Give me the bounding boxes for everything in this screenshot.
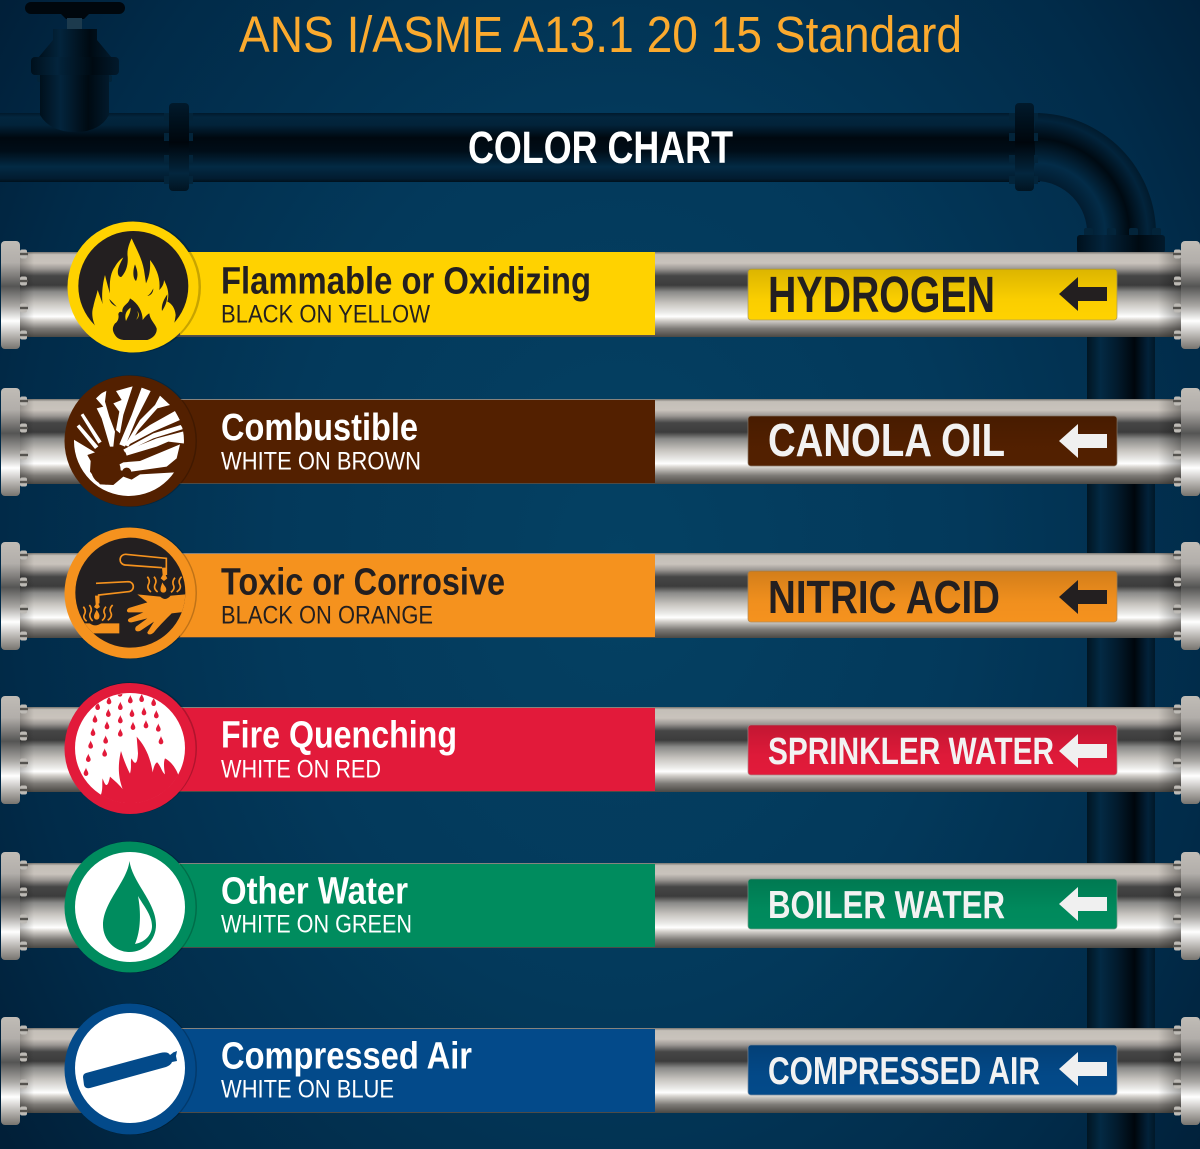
heading: Flammable or Oxidizing (221, 260, 591, 302)
icon: explosion (64, 375, 197, 507)
icon: water on fire (64, 682, 197, 814)
caption: BLACK ON ORANGE (221, 602, 433, 630)
row: other water (1, 841, 1200, 973)
pipe marker: NITRIC ACID (768, 571, 1000, 623)
caption: WHITE ON RED (221, 756, 381, 784)
valve (25, 2, 125, 132)
elbow flange (1077, 228, 1165, 253)
horizontal dark pipe (0, 113, 1040, 182)
banner (180, 400, 655, 483)
heading: Other Water (221, 870, 408, 912)
pipe marker: COMPRESSED AIR (768, 1050, 1040, 1093)
banner (180, 1029, 655, 1112)
icon: water drop (64, 841, 197, 973)
row: flammable or oxidizing (1, 221, 1200, 353)
pipe marker: CANOLA OIL (768, 414, 1005, 466)
banner (180, 252, 655, 335)
vertical dark pipe (1087, 240, 1155, 1149)
pipe marker: BOILER WATER (768, 884, 1005, 927)
row: toxic or corrosive (1, 527, 1200, 659)
silver pipe (1, 1017, 1200, 1125)
caption: WHITE ON BROWN (221, 448, 421, 476)
banner (180, 864, 655, 947)
heading: Compressed Air (221, 1036, 472, 1078)
banner (180, 554, 655, 637)
icon: corrosive (64, 527, 197, 659)
pipe marker (748, 879, 1117, 929)
right pipe flange (1009, 103, 1038, 191)
subtitle: color chart: COLOR CHART (468, 122, 733, 173)
silver pipe (1, 696, 1200, 804)
silver pipe (1, 852, 1200, 960)
heading: Toxic or Corrosive (221, 562, 505, 604)
pipe marker: SPRINKLER WATER (768, 731, 1054, 773)
caption: WHITE ON BLUE (221, 1076, 394, 1104)
icon: flame (68, 221, 201, 353)
row: fire quenching (1, 682, 1200, 814)
pipe elbow (1035, 113, 1156, 236)
row: compressed air (1, 1003, 1200, 1135)
silver pipe (1, 241, 1200, 349)
banner (180, 708, 655, 791)
silver pipe (1, 388, 1200, 496)
left pipe flange (164, 103, 193, 191)
caption: WHITE ON GREEN (221, 910, 412, 938)
title: ANS I/ASME A13.1 20 15 Standard (239, 6, 962, 63)
heading: Fire Quenching (221, 714, 457, 756)
silver pipe (1, 542, 1200, 650)
pipe marker: HYDROGEN (768, 266, 995, 323)
heading: Combustible (221, 407, 418, 449)
icon: gas cylinder (64, 1003, 197, 1135)
row: combustible (1, 375, 1200, 507)
caption: BLACK ON YELLOW (221, 300, 430, 328)
